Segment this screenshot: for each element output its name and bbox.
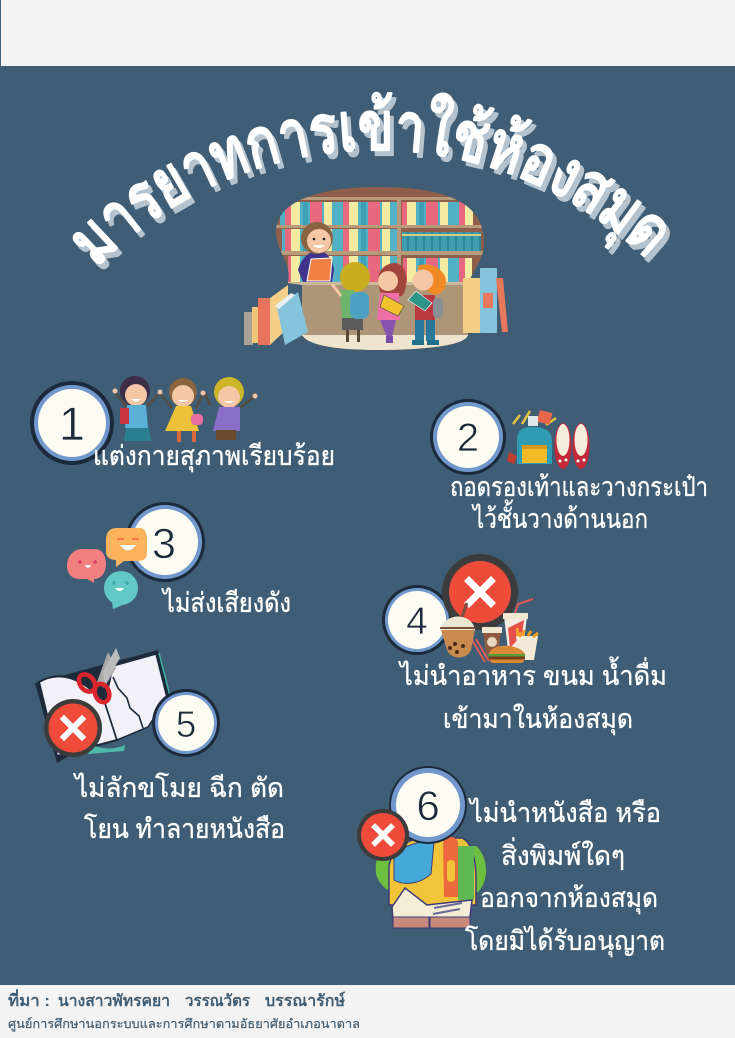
number badge 3: 3 <box>152 520 176 568</box>
text 6: ออกจากห้องสมุด <box>480 883 658 915</box>
number badge 4 <box>382 585 452 655</box>
icon: three jumping children <box>112 376 258 442</box>
text 6 <box>465 798 665 958</box>
number badge 2 <box>430 399 506 475</box>
librarian <box>298 222 334 282</box>
text 4: เข้ามาในห้องสมุด <box>443 703 633 736</box>
icon: backpack and shoes <box>507 410 590 469</box>
text 6: โดยมิได้รับอนุญาต <box>465 926 665 958</box>
text 4 <box>398 656 667 736</box>
illustration: library counter with librarian and students <box>244 185 508 355</box>
text 4: ไม่นำอาหาร ขนม น้ำดื่ม <box>398 656 667 691</box>
text 2 <box>450 472 708 534</box>
books: right stack <box>463 268 508 333</box>
footer credit <box>8 989 360 1032</box>
student: redhead with green book <box>408 264 446 345</box>
text 5: ไม่ลักขโมย ฉีก ตัด <box>73 773 284 803</box>
student: girl with yellow book <box>377 263 407 343</box>
icon: torn book with scissors and prohibited sign <box>35 648 171 763</box>
icon: speech bubbles <box>67 528 147 609</box>
number badge 1: 1 <box>59 397 85 450</box>
text 5: โยน ทำลายหนังสือ <box>84 814 285 844</box>
number badge 6: 6 <box>416 782 440 829</box>
footer credit: ศูนย์การศึกษานอกระบบและการศึกษาตามอัธยาศัยอำเภอนาตาล <box>8 1017 360 1032</box>
footer credit: นางสาวพัทรคยา <box>58 992 170 1010</box>
text 6: ไม่นำหนังสือ หรือ <box>468 798 661 828</box>
text 3: ไม่ส่งเสียงดัง <box>161 588 291 618</box>
number badge 1 <box>30 381 114 465</box>
footer credit: บรรณารักษ์ <box>265 991 345 1010</box>
title: มารยาทการเข้าใช้ห้องสมุด <box>72 92 666 264</box>
left edge stripe <box>0 0 1 66</box>
text 2: ไว้ชั้นวางด้านนอก <box>471 499 648 534</box>
footer credit: วรรณวัตร <box>185 992 250 1010</box>
number badge 4: 4 <box>406 600 428 643</box>
icon: backpack and book <box>376 837 486 928</box>
number badge 3 <box>125 502 205 582</box>
title: มารยาทการเข้าใช้ห้องสมุด <box>77 97 670 270</box>
text 6: สิ่งพิมพ์ใดๆ <box>501 837 625 871</box>
icon: prohibited sign for item 6 <box>357 809 409 861</box>
books: left stack <box>244 285 308 345</box>
number badge 5: 5 <box>176 704 196 745</box>
footer credit: ที่มา : <box>8 989 50 1010</box>
text 5 <box>73 773 285 844</box>
student: blond with backpack <box>332 262 370 342</box>
number badge 2: 2 <box>457 416 479 460</box>
number badge 5 <box>152 689 220 757</box>
icon: prohibited sign and food <box>440 554 538 663</box>
number badge 6 <box>389 766 467 844</box>
text 1: แต่งกายสุภาพเรียบร้อย <box>93 441 335 473</box>
